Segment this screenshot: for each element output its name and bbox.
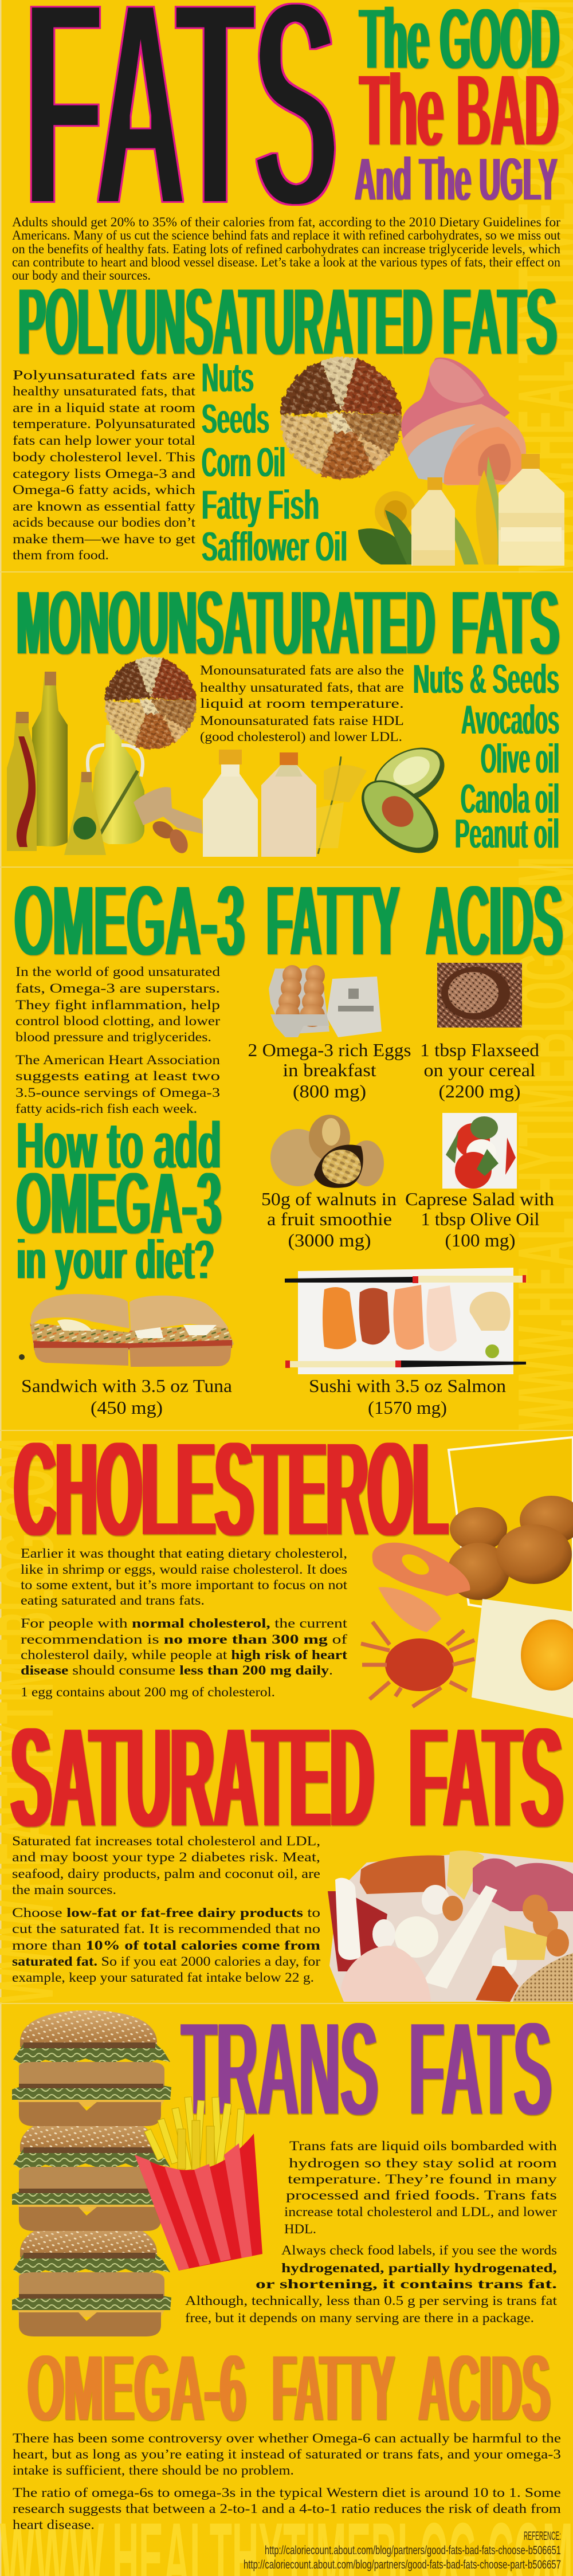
body text bbox=[200, 663, 404, 744]
captions: caprese bbox=[405, 1189, 554, 1250]
body text: the main sources. bbox=[12, 1883, 116, 1897]
image: caprese salad bbox=[442, 1113, 517, 1189]
body text: 3.5-ounce servings of Omega-3 bbox=[15, 1085, 220, 1100]
panel: polyunsaturated fats bbox=[13, 267, 564, 570]
image: fried egg photo bbox=[472, 1599, 573, 1718]
captions: flaxseed bbox=[420, 1040, 539, 1101]
milk bottle bbox=[423, 1885, 497, 1989]
body text: free, but it depends on many serving are there in a package. bbox=[185, 2311, 534, 2325]
intro text: Adults should get 20% to 35% of their calories from fat, according to the 2010 Dietary Guidelines for bbox=[12, 215, 560, 229]
image: corn bbox=[429, 456, 503, 564]
body text: Trans fats are liquid oils bombarded with bbox=[289, 2139, 558, 2153]
body text bbox=[13, 2431, 561, 2532]
captions: sandwich bbox=[21, 1375, 232, 1418]
body text: (good cholesterol) and lower LDL. bbox=[200, 730, 402, 744]
sushi: white fish bbox=[426, 1285, 457, 1351]
intro text: on the benefits of healthy fats. Eating lots of refined carbohydrates can increase triglyceride levels, which bbox=[12, 242, 560, 256]
chopsticks bottom bbox=[285, 1360, 526, 1368]
raw chicken bbox=[341, 1946, 431, 2002]
body text: heart disease. bbox=[13, 2518, 95, 2532]
body text: In the world of good unsaturated bbox=[15, 964, 221, 979]
body text: The American Heart Association bbox=[15, 1053, 221, 1067]
image: burger bottom bbox=[12, 2221, 171, 2336]
yogurt bowl bbox=[395, 1916, 438, 1958]
body text: control blood clotting, and lower bbox=[15, 1014, 220, 1028]
body text bbox=[15, 964, 221, 1116]
heading: omega-6 fatty acids: FATTY bbox=[272, 2334, 395, 2442]
body text: HDL. bbox=[284, 2222, 316, 2236]
intro text: our body and their sources. bbox=[12, 268, 151, 283]
body text: temperature. Polyunsaturated bbox=[13, 417, 196, 431]
image: walnuts bbox=[270, 1115, 384, 1188]
panel: trans fats bbox=[12, 1993, 558, 2336]
image: avocado halves bbox=[348, 736, 454, 867]
heading: omega-3 fatty acids: OMEGA-3 bbox=[14, 863, 245, 978]
body text: to some extent, but it’s more important to focus on not bbox=[21, 1578, 348, 1592]
body text: recommendation is no more than 300 mg of bbox=[21, 1632, 347, 1646]
image: eggs photo bbox=[448, 1437, 573, 1622]
body text: liquid at room temperature. bbox=[200, 696, 404, 711]
panel: saturated fats bbox=[11, 1696, 573, 2002]
image: canola flower bbox=[316, 756, 367, 854]
sushi: tuna bbox=[359, 1288, 390, 1344]
body text: and may boost your type 2 diabetes risk. Meat, bbox=[12, 1850, 320, 1864]
image: oil bottle 2 bbox=[261, 752, 316, 857]
body text: The ratio of omega-6s to omega-3s in the typical Western diet is around 10 to 1. Some bbox=[13, 2485, 561, 2500]
references bbox=[244, 2530, 561, 2571]
captions: eggs: in breakfast bbox=[283, 1060, 376, 1080]
image: crab bbox=[361, 1622, 474, 1707]
body text: intake is sufficient, there should be no problem. bbox=[13, 2463, 294, 2477]
captions: walnuts: (3000 mg) bbox=[288, 1230, 371, 1250]
captions: walnuts bbox=[261, 1189, 397, 1250]
captions: caprese: (100 mg) bbox=[445, 1230, 516, 1250]
body text: example, keep your saturated fat intake below 22 g. bbox=[12, 1970, 314, 1985]
body text: Polyunsaturated fats are bbox=[13, 368, 195, 382]
captions: sushi bbox=[309, 1375, 506, 1418]
image: nuts bbox=[279, 356, 401, 477]
image: tall oil bottle bbox=[32, 672, 68, 846]
source list: Nuts bbox=[202, 355, 254, 401]
sausages lower bbox=[476, 1966, 519, 2002]
image: oil jug bbox=[88, 725, 144, 844]
sushi: ginger bbox=[470, 1292, 511, 1331]
body text: saturated fat. So if you eat 2000 calories a day, for bbox=[12, 1954, 320, 1969]
body text: For people with normal cholesterol, the current bbox=[21, 1616, 348, 1630]
eggs bbox=[422, 1885, 449, 1915]
body text: fatty acids-rich fish each week. bbox=[15, 1101, 197, 1116]
source list: Fatty Fish bbox=[202, 482, 319, 528]
body text: healthy unsaturated fats, that are bbox=[200, 680, 404, 695]
captions: eggs: (800 mg) bbox=[293, 1081, 366, 1101]
body text: hydrogen so they stay solid at room bbox=[289, 2156, 557, 2170]
body text: fats can help lower your total bbox=[13, 433, 195, 448]
body text: Earlier it was thought that eating dietary cholesterol, bbox=[21, 1546, 347, 1561]
body text: Choose low-fat or fat-free dairy products to bbox=[12, 1905, 320, 1920]
image: tuna sandwich bbox=[19, 1294, 234, 1367]
intro text: Americans. Many of us cut the science behind fats and replace it with refined carbohydrates, so we miss out bbox=[12, 228, 561, 242]
source list bbox=[413, 656, 559, 857]
body text: more than 10% of total calories come from bbox=[12, 1938, 320, 1952]
sushi: salmon bbox=[323, 1287, 356, 1349]
captions: flaxseed: 1 tbsp Flaxseed bbox=[420, 1040, 539, 1060]
body text: increase total cholesterol and LDL, and lower bbox=[284, 2205, 557, 2219]
panel: omega-3 fatty acids bbox=[14, 863, 563, 1418]
body text: temperature. They’re found in many bbox=[288, 2172, 558, 2186]
body text: processed and fried foods. Trans fats bbox=[286, 2188, 557, 2202]
image: small triangular bottle bbox=[64, 772, 106, 855]
subheading: how to add omega-3 in your diet: How to add bbox=[17, 1108, 221, 1183]
burlap sack bbox=[513, 1953, 573, 2002]
image: shrimp bbox=[372, 1543, 470, 1632]
subheading: how to add omega-3 in your diet bbox=[17, 1108, 221, 1291]
source list: Corn Oil bbox=[202, 440, 285, 486]
body text: cut the saturated fat. It is recommended that no bbox=[12, 1922, 320, 1936]
panel: omega-3 fatty acids: OMEGA-3 bbox=[17, 1153, 221, 1254]
body text: Monounsaturated fats raise HDL bbox=[200, 713, 404, 728]
image: burger top bbox=[12, 2010, 171, 2126]
hard cheese bbox=[504, 1926, 547, 1960]
body text: research suggests that between a 2-to-1 and a 4-to-1 ratio reduces the risk of death from bbox=[13, 2501, 561, 2516]
body text: acids because our bodies don’t bbox=[13, 515, 196, 530]
image: french fries bbox=[135, 2097, 262, 2271]
body text: or shortening, it contains trans fat. bbox=[256, 2277, 557, 2291]
body text: are known as essential fatty bbox=[13, 499, 196, 513]
body text: make them—we have to get bbox=[13, 532, 196, 546]
body text: disease should consume less than 200 mg daily . bbox=[21, 1663, 333, 1677]
image: chili oil bottle bbox=[7, 712, 37, 851]
sushi: wasabi bbox=[485, 1344, 499, 1358]
sushi: shrimp bbox=[393, 1285, 424, 1350]
sausages bbox=[360, 1856, 446, 1894]
body text: hydrogenated, partially hydrogenated, bbox=[281, 2261, 557, 2275]
image: burger middle bbox=[12, 2115, 171, 2231]
body text: Monounsaturated fats are also the bbox=[200, 663, 404, 677]
raw meat bbox=[473, 1859, 573, 1911]
captions: sushi: Sushi with 3.5 oz Salmon bbox=[309, 1375, 506, 1396]
captions: flaxseed: on your cereal bbox=[424, 1060, 536, 1080]
body text bbox=[185, 2139, 558, 2325]
body text: There has been some controversy over whether Omega-6 can actually be harmful to the bbox=[13, 2431, 561, 2445]
image: peanuts bbox=[134, 787, 203, 856]
source list: Seeds bbox=[202, 396, 269, 442]
chopsticks top bbox=[285, 1275, 526, 1283]
white bottle bbox=[335, 1878, 361, 1960]
image: eggs in carton bbox=[269, 965, 382, 1037]
image: sushi plate bbox=[285, 1268, 526, 1374]
body text: category lists Omega-3 and bbox=[13, 466, 196, 481]
image: oil bottle small bbox=[411, 477, 455, 566]
body text: like in shrimp or eggs, would raise cholesterol. It does bbox=[21, 1562, 347, 1577]
body text: heart, but as long as you’re eating it instead of saturated or trans fats, and your omega-3 bbox=[13, 2447, 561, 2461]
body text: 1 egg contains about 200 mg of cholesterol. bbox=[21, 1685, 275, 1699]
body text: Omega-6 fatty acids, which bbox=[13, 483, 196, 497]
body text: eating saturated and trans fats. bbox=[21, 1593, 205, 1607]
cheese wedge bbox=[447, 1850, 484, 1900]
captions: flaxseed: (2200 mg) bbox=[439, 1081, 520, 1101]
body text: They fight inflammation, help bbox=[15, 998, 220, 1012]
body text: them from food. bbox=[13, 548, 109, 562]
intro text bbox=[12, 215, 561, 283]
image: sunflower bbox=[358, 491, 421, 564]
captions: eggs: 2 Omega-3 rich Eggs bbox=[248, 1040, 411, 1060]
body text bbox=[21, 1546, 348, 1699]
salami bbox=[328, 1891, 387, 1971]
body text: fats, Omega-3 are superstars. bbox=[15, 981, 220, 995]
captions: sandwich: (450 mg) bbox=[91, 1397, 163, 1418]
body text: body cholesterol level. This bbox=[13, 450, 195, 464]
body text: are in a liquid state at room bbox=[13, 401, 195, 415]
source list: Safflower Oil bbox=[202, 524, 347, 570]
panel: header bbox=[12, 0, 561, 283]
captions: caprese: Caprese Salad with bbox=[405, 1189, 554, 1209]
body text: suggests eating at least two bbox=[15, 1069, 220, 1083]
subheading: how to add omega-3 in your diet: in your diet? bbox=[17, 1228, 214, 1291]
body text: seafood, dairy products, palm and coconut oil, are bbox=[12, 1867, 320, 1881]
captions: walnuts: 50g of walnuts in bbox=[261, 1189, 397, 1209]
body text: Always check food labels, if you see the words bbox=[281, 2243, 557, 2257]
body text: blood pressure and triglycerides. bbox=[15, 1030, 211, 1044]
intro text: can contribute to heart and blood vessel disease. Let’s take a look at the various types of fats, their effect on bbox=[12, 255, 560, 269]
image: flaxseed bbox=[437, 963, 522, 1028]
captions: walnuts: a fruit smoothie bbox=[267, 1209, 392, 1229]
body text: Although, technically, less than 0.5 g per serving is trans fat bbox=[185, 2293, 558, 2308]
panel: omega-6 fatty acids bbox=[13, 2334, 561, 2571]
body text bbox=[12, 1834, 320, 1985]
captions: sushi: (1570 mg) bbox=[368, 1397, 447, 1418]
image: oil bottle 1 bbox=[203, 750, 258, 857]
image: oil bottle large bbox=[499, 454, 564, 566]
body text: cholesterol daily, while people at high risk of heart bbox=[21, 1648, 347, 1662]
source list bbox=[202, 355, 347, 570]
body text: healthy unsaturated fats, that bbox=[13, 384, 196, 398]
body text: Saturated fat increases total cholesterol and LDL, bbox=[12, 1834, 320, 1848]
captions: sandwich: Sandwich with 3.5 oz Tuna bbox=[21, 1375, 232, 1396]
image: fish bbox=[401, 358, 526, 485]
image: food pile of saturated fat sources bbox=[328, 1850, 573, 2002]
heading: omega-6 fatty acids: OMEGA-6 bbox=[28, 2334, 246, 2442]
image: nuts bbox=[104, 656, 195, 748]
panel: monounsaturated fats bbox=[7, 570, 559, 867]
body text bbox=[13, 368, 196, 562]
captions: eggs bbox=[248, 1040, 411, 1101]
panel: cholesterol bbox=[14, 1412, 573, 1718]
captions: caprese: 1 tbsp Olive Oil bbox=[421, 1209, 540, 1229]
